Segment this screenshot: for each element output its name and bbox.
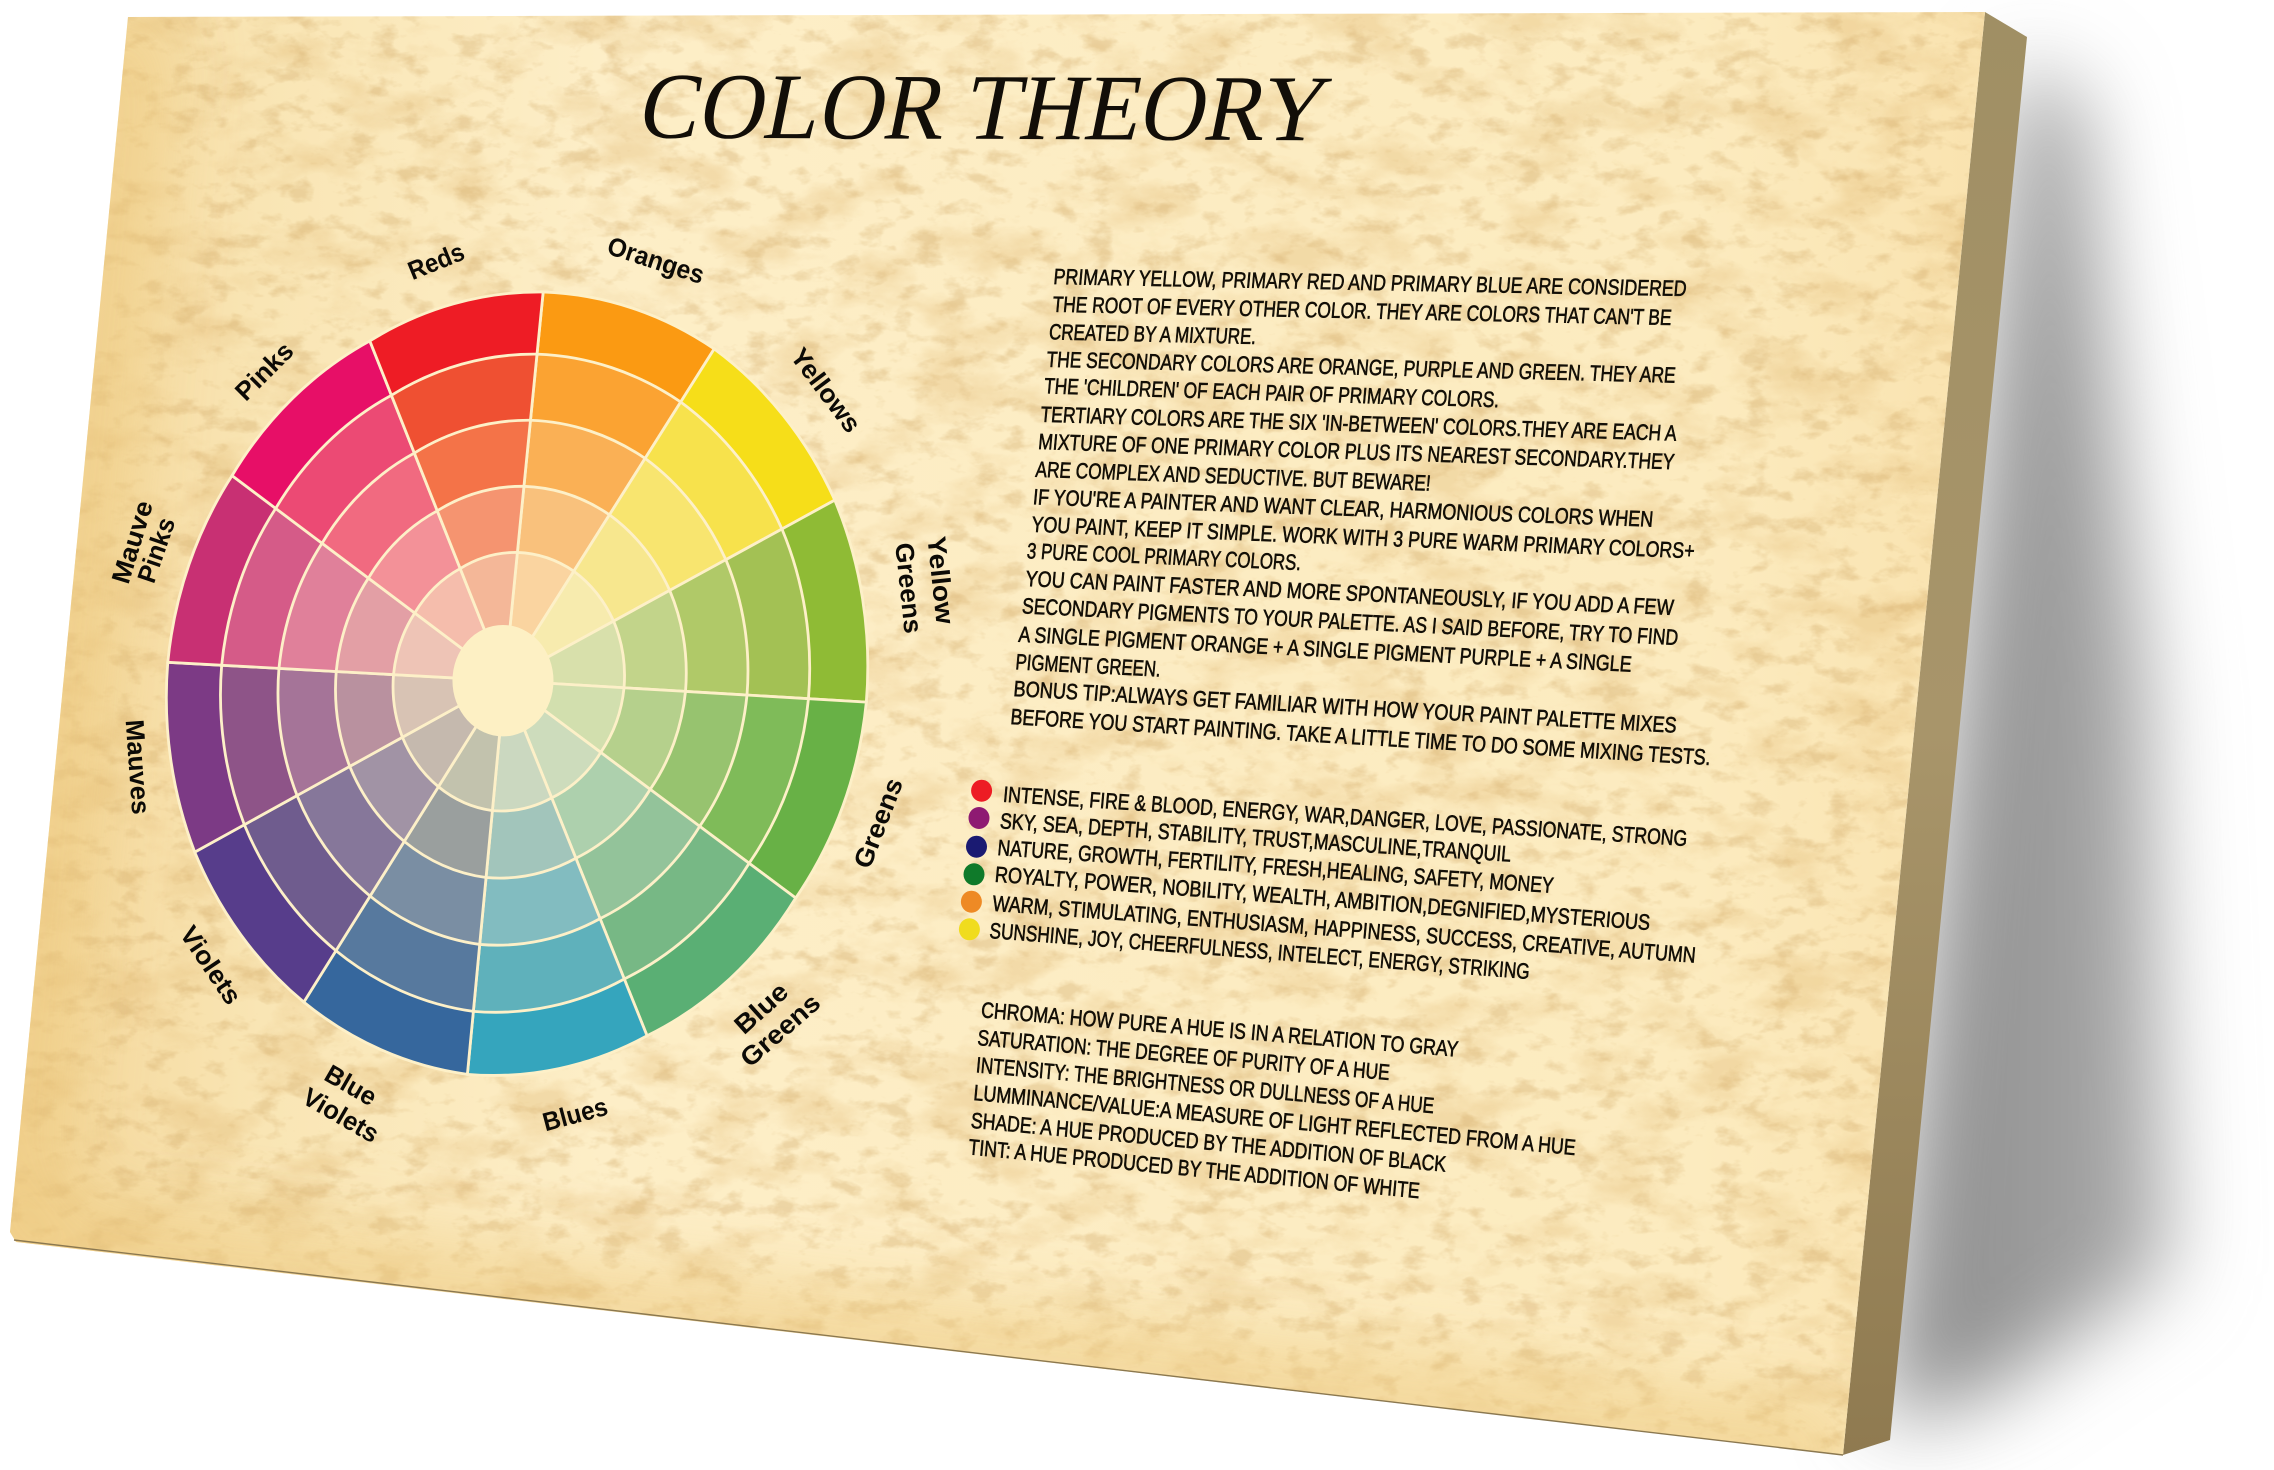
legend text lines: SKY, SEA, DEPTH, STABILITY, TRUST,MASCULINE,TRANQUIL — [999, 808, 1512, 867]
wheel ring 1 (outermost, pure hues) — [166, 292, 868, 1075]
legend dot: red — [971, 780, 992, 802]
text block: colour explanation: PIGMENT GREEN. — [1015, 649, 1162, 682]
wheel ring 3 — [278, 420, 748, 945]
label: Yellow Greens — [889, 535, 961, 635]
label: Violets: Violets — [174, 920, 248, 1010]
legend text lines: WARM, STIMULATING, ENTHUSIASM, HAPPINESS, SUCCESS, CREATIVE, AUTUMN — [992, 891, 1697, 968]
text block: definitions: TINT: A HUE PRODUCED BY THE ADDITION OF WHITE — [968, 1134, 1421, 1203]
wheel ring 2 — [220, 354, 810, 1012]
label: Blue Violets: Violets — [298, 1081, 384, 1149]
text block: definitions: SHADE: A HUE PRODUCED BY THE ADDITION OF BLACK — [970, 1108, 1447, 1177]
text block: definitions — [968, 997, 1577, 1203]
legend dot: green — [964, 863, 984, 885]
label: Yellow Greens: Greens — [889, 541, 929, 635]
text block: colour explanation: MIXTURE OF ONE PRIMARY COLOR PLUS ITS NEAREST SECONDARY.THEY — [1037, 429, 1676, 474]
legend dot: navy — [966, 836, 987, 858]
label: Reds: Reds — [404, 236, 469, 286]
label: Mauves: Mauves — [120, 719, 156, 815]
text block: definitions: LUMMINANCE/VALUE:A MEASURE OF LIGHT REFLECTED FROM A HUE — [973, 1080, 1577, 1160]
legend text lines: SUNSHINE, JOY, CHEERFULNESS, INTELECT, ENERGY, STRIKING — [989, 918, 1531, 984]
text block: colour explanation: CREATED BY A MIXTURE. — [1048, 319, 1257, 349]
text block: colour explanation: TERTIARY COLORS ARE THE SIX 'IN-BETWEEN' COLORS.THEY ARE EACH A — [1040, 402, 1678, 446]
label: Yellow Greens: Yellow — [921, 535, 961, 626]
text block: colour explanation: THE 'CHILDREN' OF EACH PAIR OF PRIMARY COLORS. — [1043, 373, 1500, 412]
legend dot: orange — [961, 891, 982, 913]
canvas side edge — [1843, 12, 2027, 1455]
text block: definitions: CHROMA: HOW PURE A HUE IS IN A RELATION TO GRAY — [980, 997, 1460, 1062]
text block: colour explanation: ARE COMPLEX AND SEDUCTIVE. BUT BEWARE! — [1035, 457, 1432, 496]
bottom edge line — [14, 1240, 1843, 1455]
label: Blues: Blues — [539, 1091, 611, 1137]
label: Mauve Pinks: Pinks — [131, 513, 181, 587]
wheel hub — [452, 625, 553, 736]
text block: colour explanation: YOU CAN PAINT FASTER AND MORE SPONTANEOUSLY, IF YOU ADD A FEW — [1025, 566, 1675, 620]
text block: colour explanation: SECONDARY PIGMENTS TO YOUR PALETTE. AS I SAID BEFORE, TRY TO FIND — [1021, 593, 1679, 650]
legend dot: purple — [968, 807, 990, 829]
text block: colour explanation — [1010, 264, 1712, 770]
label: Yellows: Yellows — [784, 342, 867, 438]
legend text lines: ROYALTY, POWER, NOBILITY, WEALTH, AMBITION,DEGNIFIED,MYSTERIOUS — [994, 862, 1651, 935]
text block: colour explanation: BONUS TIP:ALWAYS GET FAMILIAR WITH HOW YOUR PAINT PALETTE MIXES — [1013, 676, 1678, 738]
text block: colour explanation: THE SECONDARY COLORS ARE ORANGE, PURPLE AND GREEN. THEY ARE — [1046, 347, 1677, 388]
text block: definitions: SATURATION: THE DEGREE OF PURITY OF A HUE — [977, 1025, 1391, 1085]
label: Blue Violets: Blue — [320, 1058, 382, 1112]
text block: colour explanation: YOU PAINT, KEEP IT SIMPLE. WORK WITH 3 PURE WARM PRIMARY COLORS+ — [1031, 512, 1696, 563]
label: Greens: Greens — [847, 774, 909, 872]
text block: colour explanation: PRIMARY YELLOW, PRIMARY RED AND PRIMARY BLUE ARE CONSIDERED — [1053, 264, 1688, 301]
text block: colour explanation: A SINGLE PIGMENT ORANGE + A SINGLE PIGMENT PURPLE + A SINGLE — [1018, 622, 1633, 677]
text block: colour explanation: 3 PURE COOL PRIMARY COLORS. — [1026, 538, 1302, 575]
label: Pinks: Pinks — [229, 336, 299, 406]
cast shadow on the wall — [1880, 60, 2170, 1425]
legend dot: yellow — [959, 918, 980, 940]
wheel labels — [105, 230, 961, 1149]
title: COLOR THEORY — [632, 53, 1339, 161]
text block: colour explanation: THE ROOT OF EVERY OTHER COLOR. THEY ARE COLORS THAT CAN'T BE — [1052, 292, 1673, 330]
colour meaning legend — [959, 780, 1697, 984]
label: Blue Greens: Blue — [728, 976, 794, 1040]
label: Mauve Pinks — [105, 497, 181, 587]
label: Oranges: Oranges — [604, 230, 708, 290]
colour wheel — [166, 292, 868, 1075]
label: Mauve Pinks: Mauve — [105, 497, 159, 587]
label: Blue Greens: Greens — [734, 987, 826, 1073]
legend text lines — [989, 782, 1697, 984]
text block: definitions: INTENSITY: THE BRIGHTNESS OR DULLNESS OF A HUE — [975, 1052, 1435, 1118]
text block: colour explanation: BEFORE YOU START PAINTING. TAKE A LITTLE TIME TO DO SOME MIXING TESTS. — [1010, 704, 1712, 770]
legend text lines: NATURE, GROWTH, FERTILITY, FRESH,HEALING, SAFETY, MONEY — [997, 835, 1555, 898]
text block: colour explanation: IF YOU'RE A PAINTER AND WANT CLEAR, HARMONIOUS COLORS WHEN — [1032, 484, 1654, 532]
wheel ring 5 (innermost tints) — [393, 552, 625, 811]
legend text lines: INTENSE, FIRE & BLOOD, ENERGY, WAR,DANGER, LOVE, PASSIONATE, STRONG — [1002, 782, 1688, 851]
wheel ring 4 — [336, 486, 686, 878]
